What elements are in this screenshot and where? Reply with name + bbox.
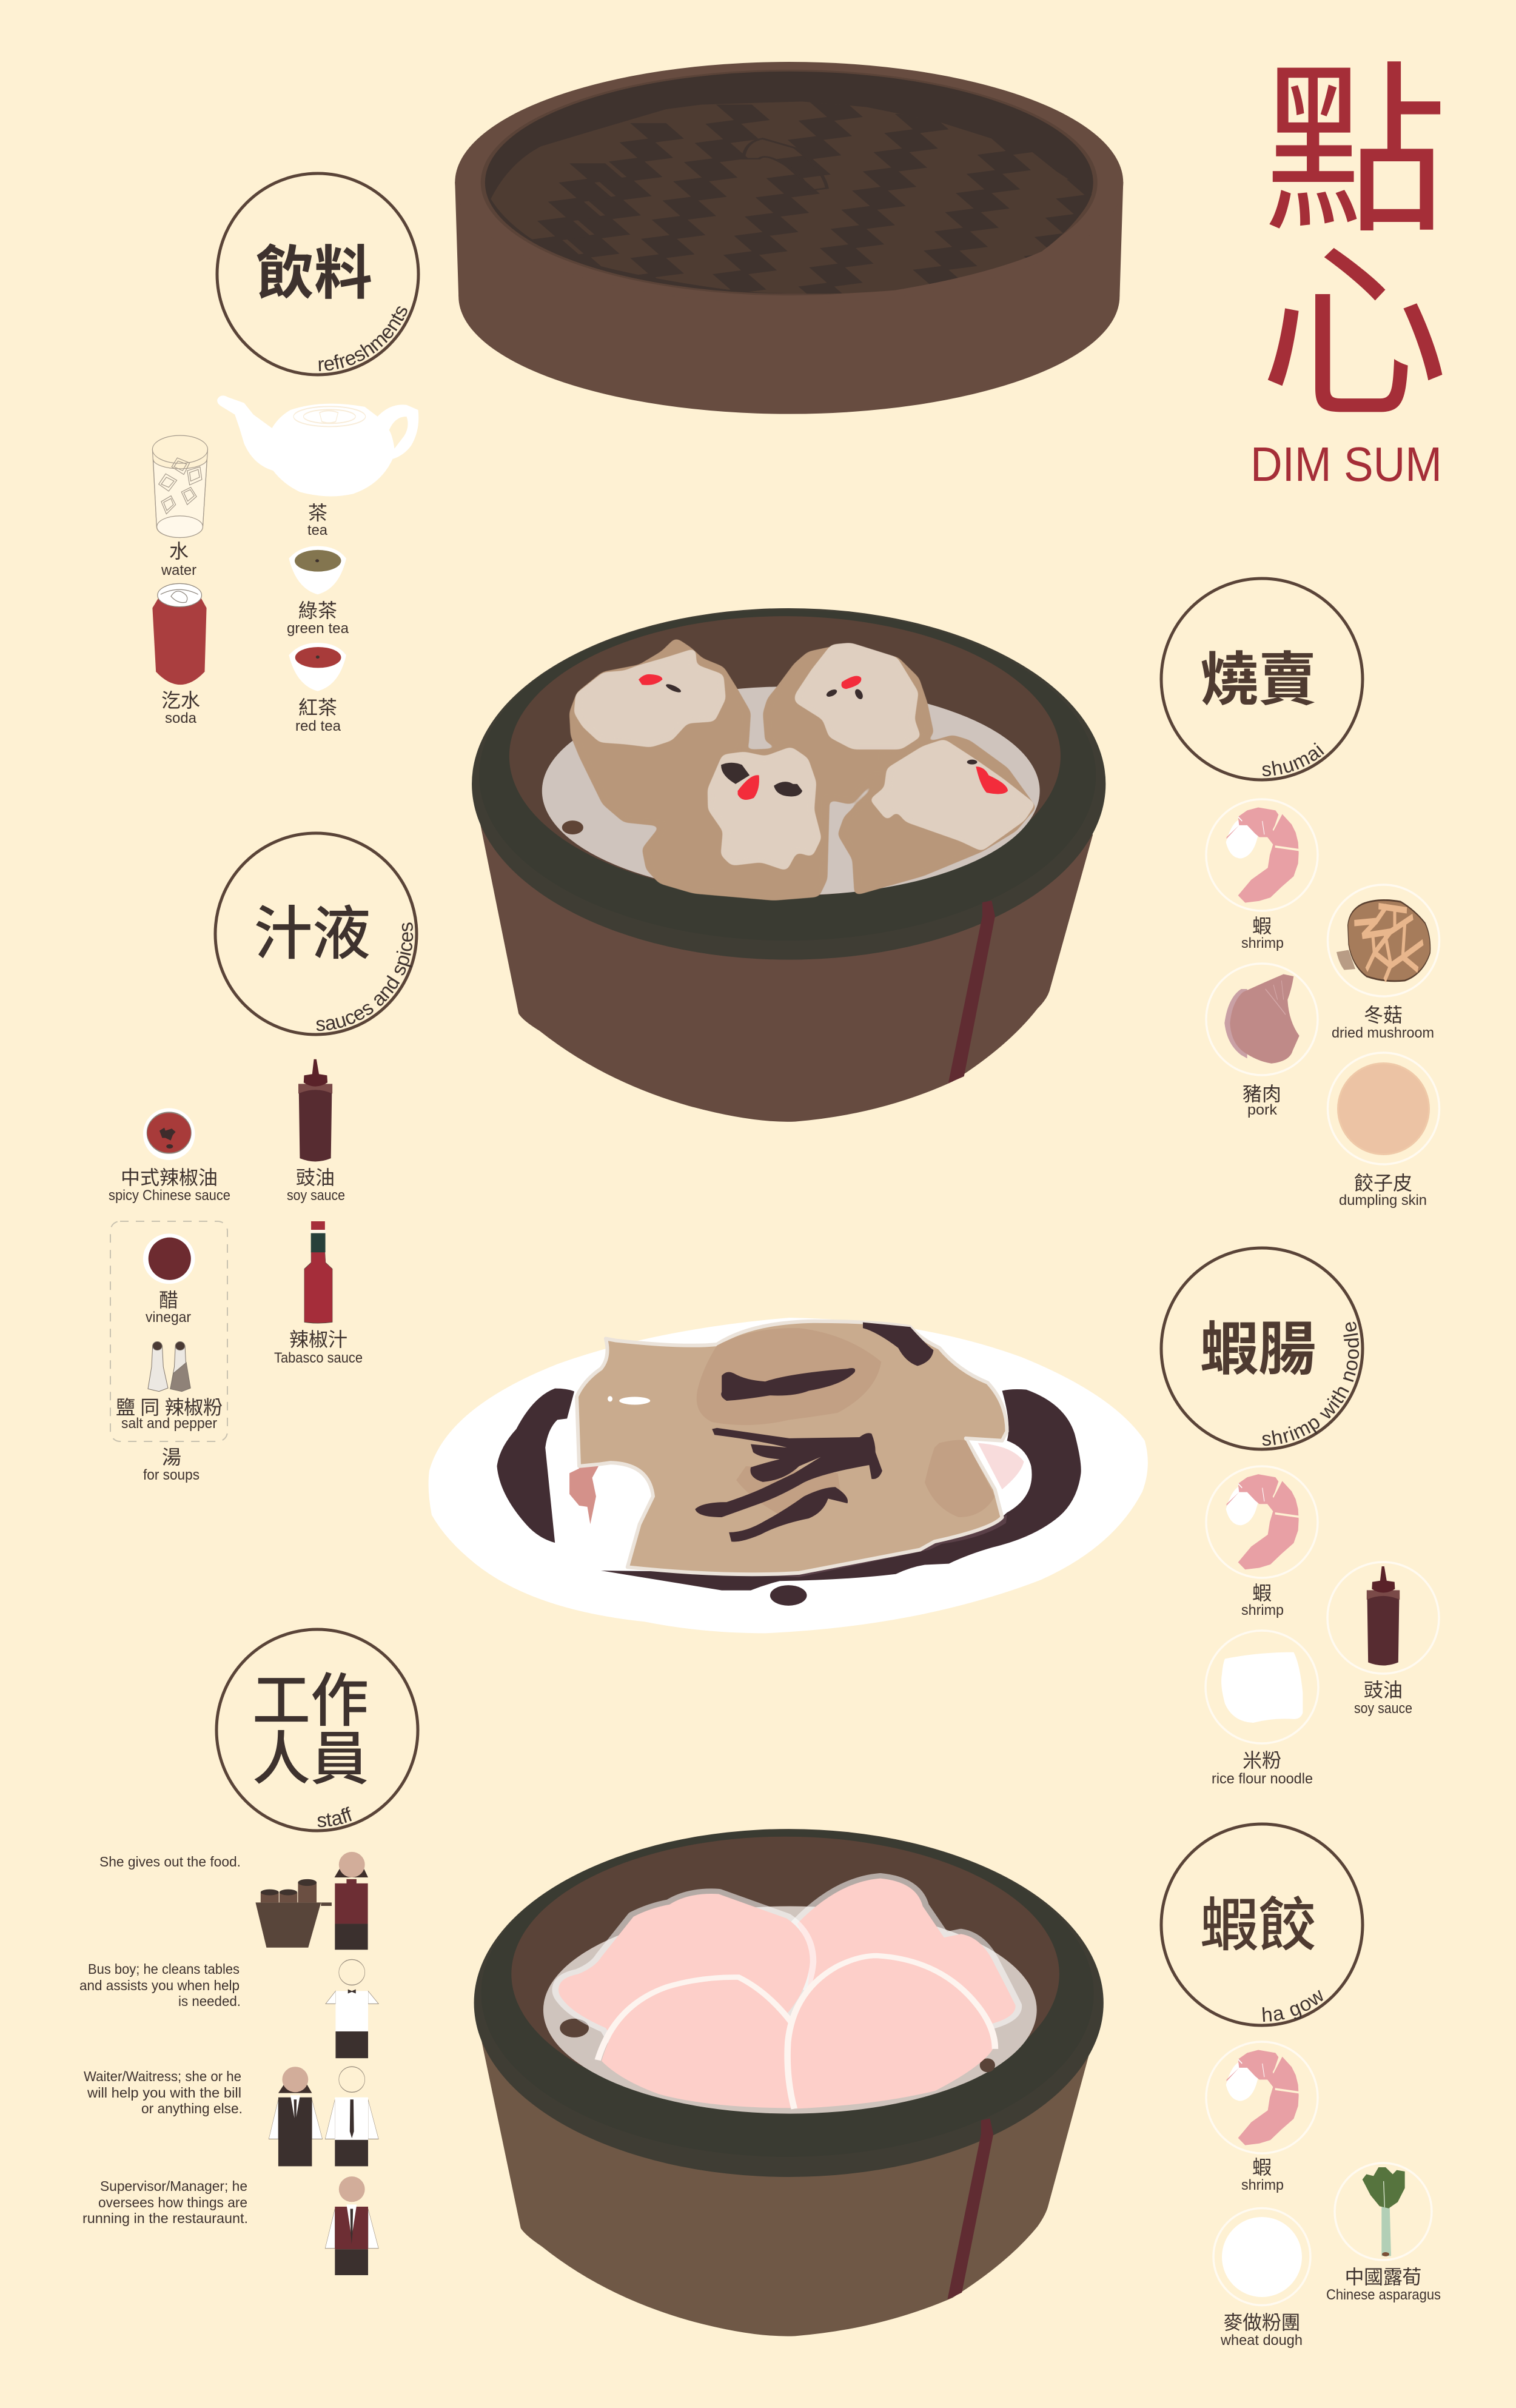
heading: shumai: shumai bbox=[1263, 742, 1324, 776]
ingredient: wheat dough: wheat dough bbox=[1220, 2332, 1303, 2349]
label: red tea bbox=[295, 697, 341, 734]
steamer rim bbox=[472, 608, 1105, 960]
staff: food cart lady bbox=[99, 1852, 368, 1950]
noodle ingredients bbox=[1206, 1466, 1439, 1787]
ingredient: shrimp: shrimp bbox=[1241, 1602, 1284, 1618]
staff: supervisor: Supervisor/Manager; he bbox=[100, 2178, 247, 2194]
label: soda: soda bbox=[165, 710, 197, 726]
ingredient: pork: 豬肉 bbox=[1243, 1083, 1281, 1105]
sauce: tabasco bbox=[274, 1221, 363, 1366]
staff: bus boy: is needed. bbox=[178, 1993, 241, 2009]
lid body bbox=[458, 179, 1119, 414]
ingredient: shrimp bbox=[1206, 2042, 1318, 2193]
staff: waiter and waitress: or anything else. bbox=[141, 2101, 243, 2116]
staff: bus boy: Bus boy; he cleans tables bbox=[88, 1961, 240, 1977]
sauce: spicy chinese sauce: 中式辣椒油 bbox=[121, 1167, 218, 1189]
noodle shading bbox=[697, 1328, 995, 1517]
title english: DIM SUM bbox=[1250, 437, 1442, 491]
ingredient: dried mushroom: dried mushroom bbox=[1332, 1025, 1434, 1041]
staff: supervisor bbox=[82, 2176, 378, 2275]
ingredient: chinese asparagus: Chinese asparagus bbox=[1326, 2287, 1441, 2303]
steamer: shumai bbox=[472, 608, 1105, 1122]
ingredient: shrimp: shrimp bbox=[1241, 935, 1284, 951]
ingredient: rice flour noodle: 米粉 bbox=[1243, 1749, 1281, 1771]
ingredient: soy sauce: 豉油 bbox=[1364, 1679, 1403, 1701]
heading: sauces and spices: sauces and spices bbox=[317, 922, 414, 1031]
heading: staff: staff bbox=[318, 1806, 352, 1828]
ingredient: soy sauce bbox=[1327, 1562, 1439, 1717]
label: red tea: red tea bbox=[295, 718, 341, 734]
sauces panel bbox=[109, 1059, 363, 1483]
label: red tea: 紅茶 bbox=[298, 697, 337, 719]
drinks panel bbox=[152, 395, 418, 734]
label: soda bbox=[161, 689, 200, 726]
title chinese: 心 bbox=[1259, 230, 1449, 441]
ingredient: chinese asparagus bbox=[1326, 2163, 1441, 2303]
paper liner bbox=[543, 1906, 1037, 2114]
shrimp red topping and mushroom bits bbox=[639, 674, 1008, 800]
sauce: vinegar: vinegar bbox=[146, 1309, 191, 1326]
bamboo weave bbox=[491, 102, 1092, 293]
staff: waiter and waitress: will help you with the bill bbox=[87, 2085, 241, 2101]
sauce: soy sauce bbox=[287, 1059, 345, 1204]
ingredient: shrimp: shrimp bbox=[1241, 2177, 1284, 2193]
lid interior bbox=[483, 70, 1095, 295]
lid handle bbox=[743, 139, 827, 190]
sauce: tabasco: 辣椒汁 bbox=[289, 1329, 347, 1350]
title chinese: 點 bbox=[1263, 50, 1447, 255]
steamer interior bbox=[509, 616, 1061, 896]
steamer body bbox=[480, 2035, 1088, 2336]
staff: waiter and waitress bbox=[84, 2067, 378, 2166]
title: dim sum bbox=[1250, 50, 1449, 491]
label: green tea: 綠茶 bbox=[298, 600, 337, 622]
staff: supervisor: running in the restauraunt. bbox=[82, 2210, 248, 2226]
icon: green tea cup bbox=[289, 546, 346, 594]
sauce: tabasco: Tabasco sauce bbox=[274, 1350, 363, 1366]
heading: shrimp with noodle: 蝦腸 bbox=[1200, 1317, 1316, 1382]
ha gow ingredients bbox=[1206, 2042, 1441, 2349]
staff: food cart lady: She gives out the food. bbox=[99, 1854, 241, 1870]
heading: refreshments: refreshments bbox=[319, 306, 408, 371]
ingredient: dumpling skin: 餃子皮 bbox=[1354, 1172, 1412, 1194]
ingredient: dumpling skin: dumpling skin bbox=[1339, 1192, 1427, 1209]
strap bbox=[947, 2119, 993, 2299]
icon: red tea cup bbox=[289, 643, 346, 691]
steamer interior bbox=[511, 1837, 1059, 2111]
heading: staff: 工作 bbox=[252, 1669, 369, 1734]
staff: bus boy: and assists you when help bbox=[79, 1977, 240, 1993]
dashed box bbox=[110, 1221, 227, 1441]
ingredient: rice flour noodle bbox=[1206, 1631, 1318, 1787]
soy sauce drizzle bbox=[695, 1323, 933, 1541]
steamer lid bbox=[441, 62, 1131, 414]
ingredient: shrimp: 蝦 bbox=[1252, 2156, 1272, 2178]
label: for soups: for soups bbox=[143, 1467, 200, 1483]
shrimp showing through bbox=[569, 1442, 599, 1524]
heading: sauces and spices: 汁液 bbox=[254, 902, 371, 967]
heading: staff bbox=[215, 1628, 420, 1833]
sauce: soy sauce: 豉油 bbox=[296, 1167, 335, 1189]
ingredient: rice flour noodle: rice flour noodle bbox=[1212, 1771, 1313, 1787]
heading: shumai: 燒賣 bbox=[1200, 648, 1316, 713]
ingredient: shrimp: 蝦 bbox=[1252, 915, 1272, 937]
heading: shrimp with noodle: shrimp with noodle bbox=[1263, 1322, 1360, 1446]
group: for soups bbox=[110, 1221, 227, 1483]
highlights bbox=[608, 1396, 612, 1401]
ingredient: shrimp bbox=[1206, 1466, 1318, 1618]
heading: shumai bbox=[1159, 577, 1364, 781]
staff: supervisor: oversees how things are bbox=[98, 2195, 247, 2210]
icon: teapot bbox=[217, 395, 418, 497]
heading: refreshments bbox=[216, 172, 420, 376]
ingredient: chinese asparagus: 中國露荀 bbox=[1345, 2266, 1421, 2288]
steamer: ha gow bbox=[474, 1829, 1104, 2336]
heading: ha gow bbox=[1159, 1823, 1364, 2027]
ingredient: dried mushroom: 冬菇 bbox=[1364, 1004, 1403, 1026]
white plate bbox=[429, 1318, 1148, 1633]
ingredient: wheat dough bbox=[1213, 2208, 1310, 2349]
ingredient: dried mushroom bbox=[1328, 885, 1440, 1041]
shumai ingredients bbox=[1206, 799, 1440, 1209]
plate: shrimp rice noodle bbox=[429, 1318, 1148, 1633]
paper liner bbox=[542, 686, 1040, 895]
sauce: salt and pepper: salt and pepper bbox=[121, 1415, 217, 1432]
heading: ha gow: 蝦餃 bbox=[1200, 1893, 1316, 1958]
rice noodle bbox=[577, 1321, 1007, 1574]
heading: sauces and spices bbox=[213, 832, 418, 1036]
heading: shrimp with noodle bbox=[1159, 1247, 1364, 1451]
sauce: soy sauce: soy sauce bbox=[287, 1187, 345, 1204]
label: green tea: green tea bbox=[287, 620, 349, 637]
staff: waiter and waitress: Waiter/Waitress; she or he bbox=[84, 2068, 241, 2084]
icon: soda can bbox=[152, 583, 207, 685]
staff: bus boy bbox=[79, 1959, 378, 2058]
sauce: salt and pepper: 鹽 同 辣椒粉 bbox=[116, 1397, 223, 1418]
sauce: vinegar: 醋 bbox=[159, 1289, 178, 1311]
label: tea: 茶 bbox=[308, 502, 327, 524]
shumai dumplings bbox=[572, 640, 1033, 899]
ingredient: wheat dough: 麥做粉團 bbox=[1224, 2312, 1300, 2333]
ingredient: pork: pork bbox=[1247, 1102, 1278, 1118]
label: soda: 汔水 bbox=[161, 689, 200, 711]
ingredient: dumpling skin bbox=[1328, 1053, 1440, 1209]
sauce pool bbox=[497, 1389, 1081, 1606]
ingredient: shrimp bbox=[1206, 799, 1318, 951]
sauce: vinegar bbox=[143, 1233, 195, 1326]
heading: refreshments: 飲料 bbox=[256, 241, 372, 306]
front dumplings bbox=[602, 1980, 795, 2108]
ingredient: shrimp: 蝦 bbox=[1252, 1582, 1272, 1604]
sauce: salt and pepper bbox=[116, 1342, 223, 1432]
heading: staff: 人員 bbox=[252, 1727, 369, 1792]
label: tea bbox=[307, 502, 328, 538]
label: water bbox=[161, 540, 196, 579]
label: water: 水 bbox=[169, 540, 189, 562]
icon: water glass bbox=[152, 435, 207, 538]
label: tea: tea bbox=[307, 522, 328, 538]
label: water: water bbox=[161, 562, 196, 579]
label: for soups: 湯 bbox=[162, 1446, 181, 1468]
ha gow dumplings bbox=[558, 1879, 1016, 2109]
staff panel bbox=[79, 1852, 378, 2275]
dumpling pleat outlines bbox=[598, 1977, 792, 2060]
label: green tea bbox=[287, 600, 349, 637]
steamer rim bbox=[474, 1829, 1104, 2177]
ingredient: pork bbox=[1206, 964, 1318, 1118]
ingredient: soy sauce: soy sauce bbox=[1354, 1700, 1412, 1717]
label: for soups bbox=[143, 1446, 200, 1483]
strap bbox=[948, 900, 995, 1083]
heading: ha gow: ha gow bbox=[1263, 1990, 1323, 2022]
sauce: spicy chinese sauce: spicy Chinese sauce bbox=[109, 1187, 230, 1204]
sauce: spicy chinese sauce bbox=[109, 1108, 230, 1204]
title chinese bbox=[1259, 50, 1449, 441]
steamer body bbox=[476, 803, 1093, 1122]
back dumplings bbox=[558, 1879, 1016, 2059]
